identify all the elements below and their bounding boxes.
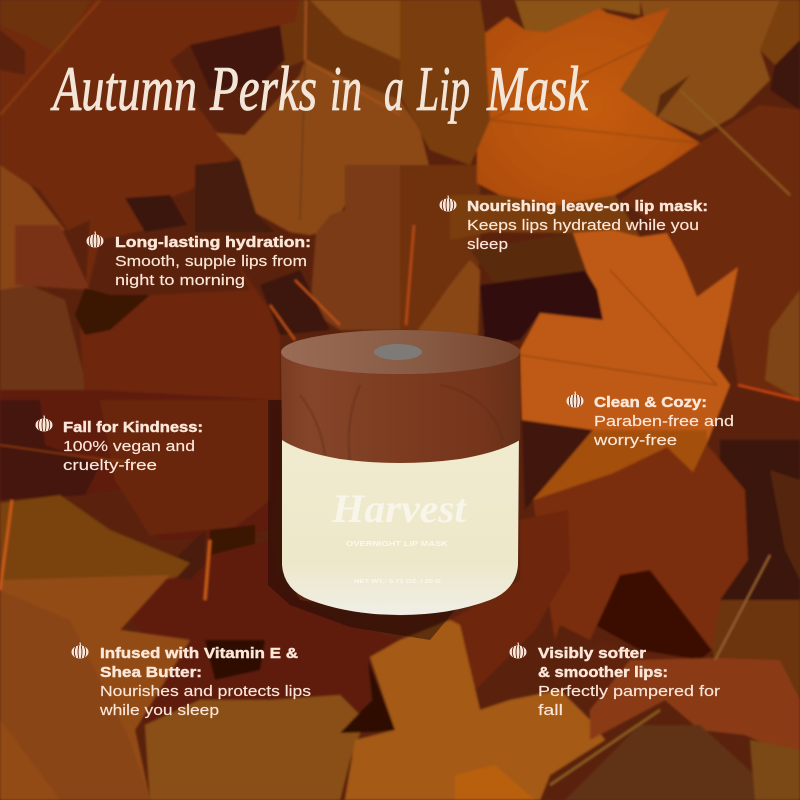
callout text — [593, 394, 734, 449]
callout text: Fall for Kindness: — [63, 419, 203, 436]
callout text: Smooth, supple lips from — [115, 253, 307, 270]
callout: clean and cozy — [566, 392, 734, 449]
title: Autumn — [50, 53, 197, 124]
callout text: while you sleep — [99, 702, 219, 719]
callout text: Shea Butter: — [100, 664, 202, 681]
callout: softer smoother lips — [510, 642, 720, 719]
title: Mask — [486, 53, 589, 124]
callout text — [99, 645, 311, 719]
callout text: Nourishing leave-on lip mask: — [467, 198, 708, 215]
callout text: fall — [538, 702, 563, 719]
callout text: 100% vegan and — [63, 438, 195, 455]
icon: pumpkin — [86, 232, 104, 248]
callout text: Perfectly pampered for — [538, 683, 720, 700]
jar label: brand name: Harvest — [331, 486, 468, 531]
title: Lip — [416, 53, 470, 124]
lid top — [281, 330, 520, 374]
callout text — [63, 419, 203, 474]
jar shadow — [268, 400, 455, 640]
icon: pumpkin — [510, 642, 526, 658]
icon: pumpkin — [72, 642, 88, 658]
callout text — [115, 234, 311, 289]
title: a — [384, 53, 404, 124]
callout text — [538, 645, 720, 719]
glass body — [282, 430, 519, 615]
callout: vitamin E and shea butter — [72, 642, 311, 719]
callout text: Infused with Vitamin E & — [100, 645, 298, 662]
title — [50, 53, 589, 124]
callout text: Paraben-free and — [594, 413, 734, 430]
callout text: & smoother lips: — [538, 664, 668, 681]
callout text — [467, 198, 708, 253]
callout text: Visibly softer — [538, 645, 646, 662]
callout text: Clean & Cozy: — [594, 394, 707, 411]
jar label: product type: OVERNIGHT LIP MASK — [346, 539, 449, 548]
icon: pumpkin — [440, 196, 456, 212]
icon: pumpkin — [566, 392, 584, 408]
lid wood grain — [300, 385, 503, 460]
jar label: net weight: NET WT.: 0.71 OZ. / 20 G — [354, 579, 441, 585]
product jar — [268, 330, 520, 640]
callout text: cruelty-free — [63, 457, 157, 474]
callout: long-lasting hydration — [86, 232, 311, 289]
title: in — [330, 53, 362, 124]
callout text: sleep — [467, 236, 508, 253]
callout text: worry-free — [593, 432, 677, 449]
lid emblem — [374, 344, 422, 360]
title: Perks — [209, 53, 317, 124]
callout: nourishing leave-on lip mask — [440, 196, 708, 253]
wood lid side — [281, 352, 520, 463]
callout text: Long-lasting hydration: — [115, 234, 311, 251]
callout text: night to morning — [115, 272, 245, 289]
callout text: Keeps lips hydrated while you — [467, 217, 699, 234]
callout text: Nourishes and protects lips — [100, 683, 311, 700]
icon: pumpkin — [36, 416, 52, 432]
callout: fall for kindness — [36, 416, 203, 474]
